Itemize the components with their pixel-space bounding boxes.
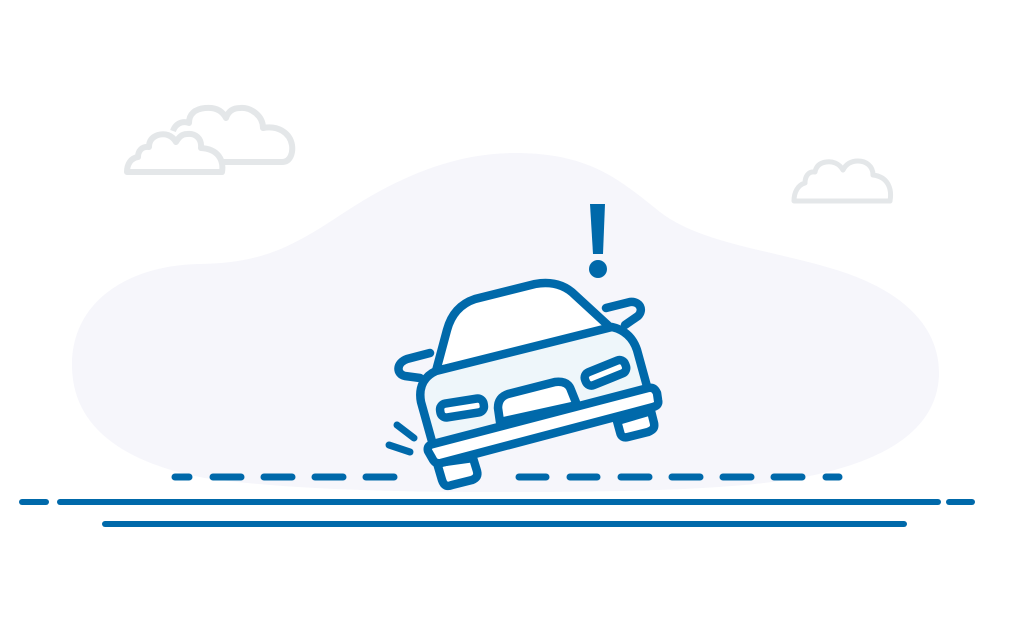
left headlight [439, 398, 485, 418]
right wheel [617, 411, 654, 437]
road lines [22, 502, 972, 524]
windshield [436, 283, 612, 371]
icon: car [389, 283, 658, 486]
right headlight [583, 358, 628, 387]
grille [498, 382, 577, 422]
left mirror [398, 353, 430, 378]
cloud: front left [127, 134, 222, 172]
dashed lane line [175, 474, 839, 480]
cloud: back left [173, 108, 292, 162]
car body [420, 327, 648, 445]
background blob [72, 153, 939, 492]
bumper [428, 388, 658, 463]
left wheel [437, 458, 477, 486]
right mirror [606, 302, 641, 325]
impact marks [389, 425, 414, 452]
cloud: right [794, 161, 891, 201]
icon: exclamation mark [589, 204, 607, 278]
